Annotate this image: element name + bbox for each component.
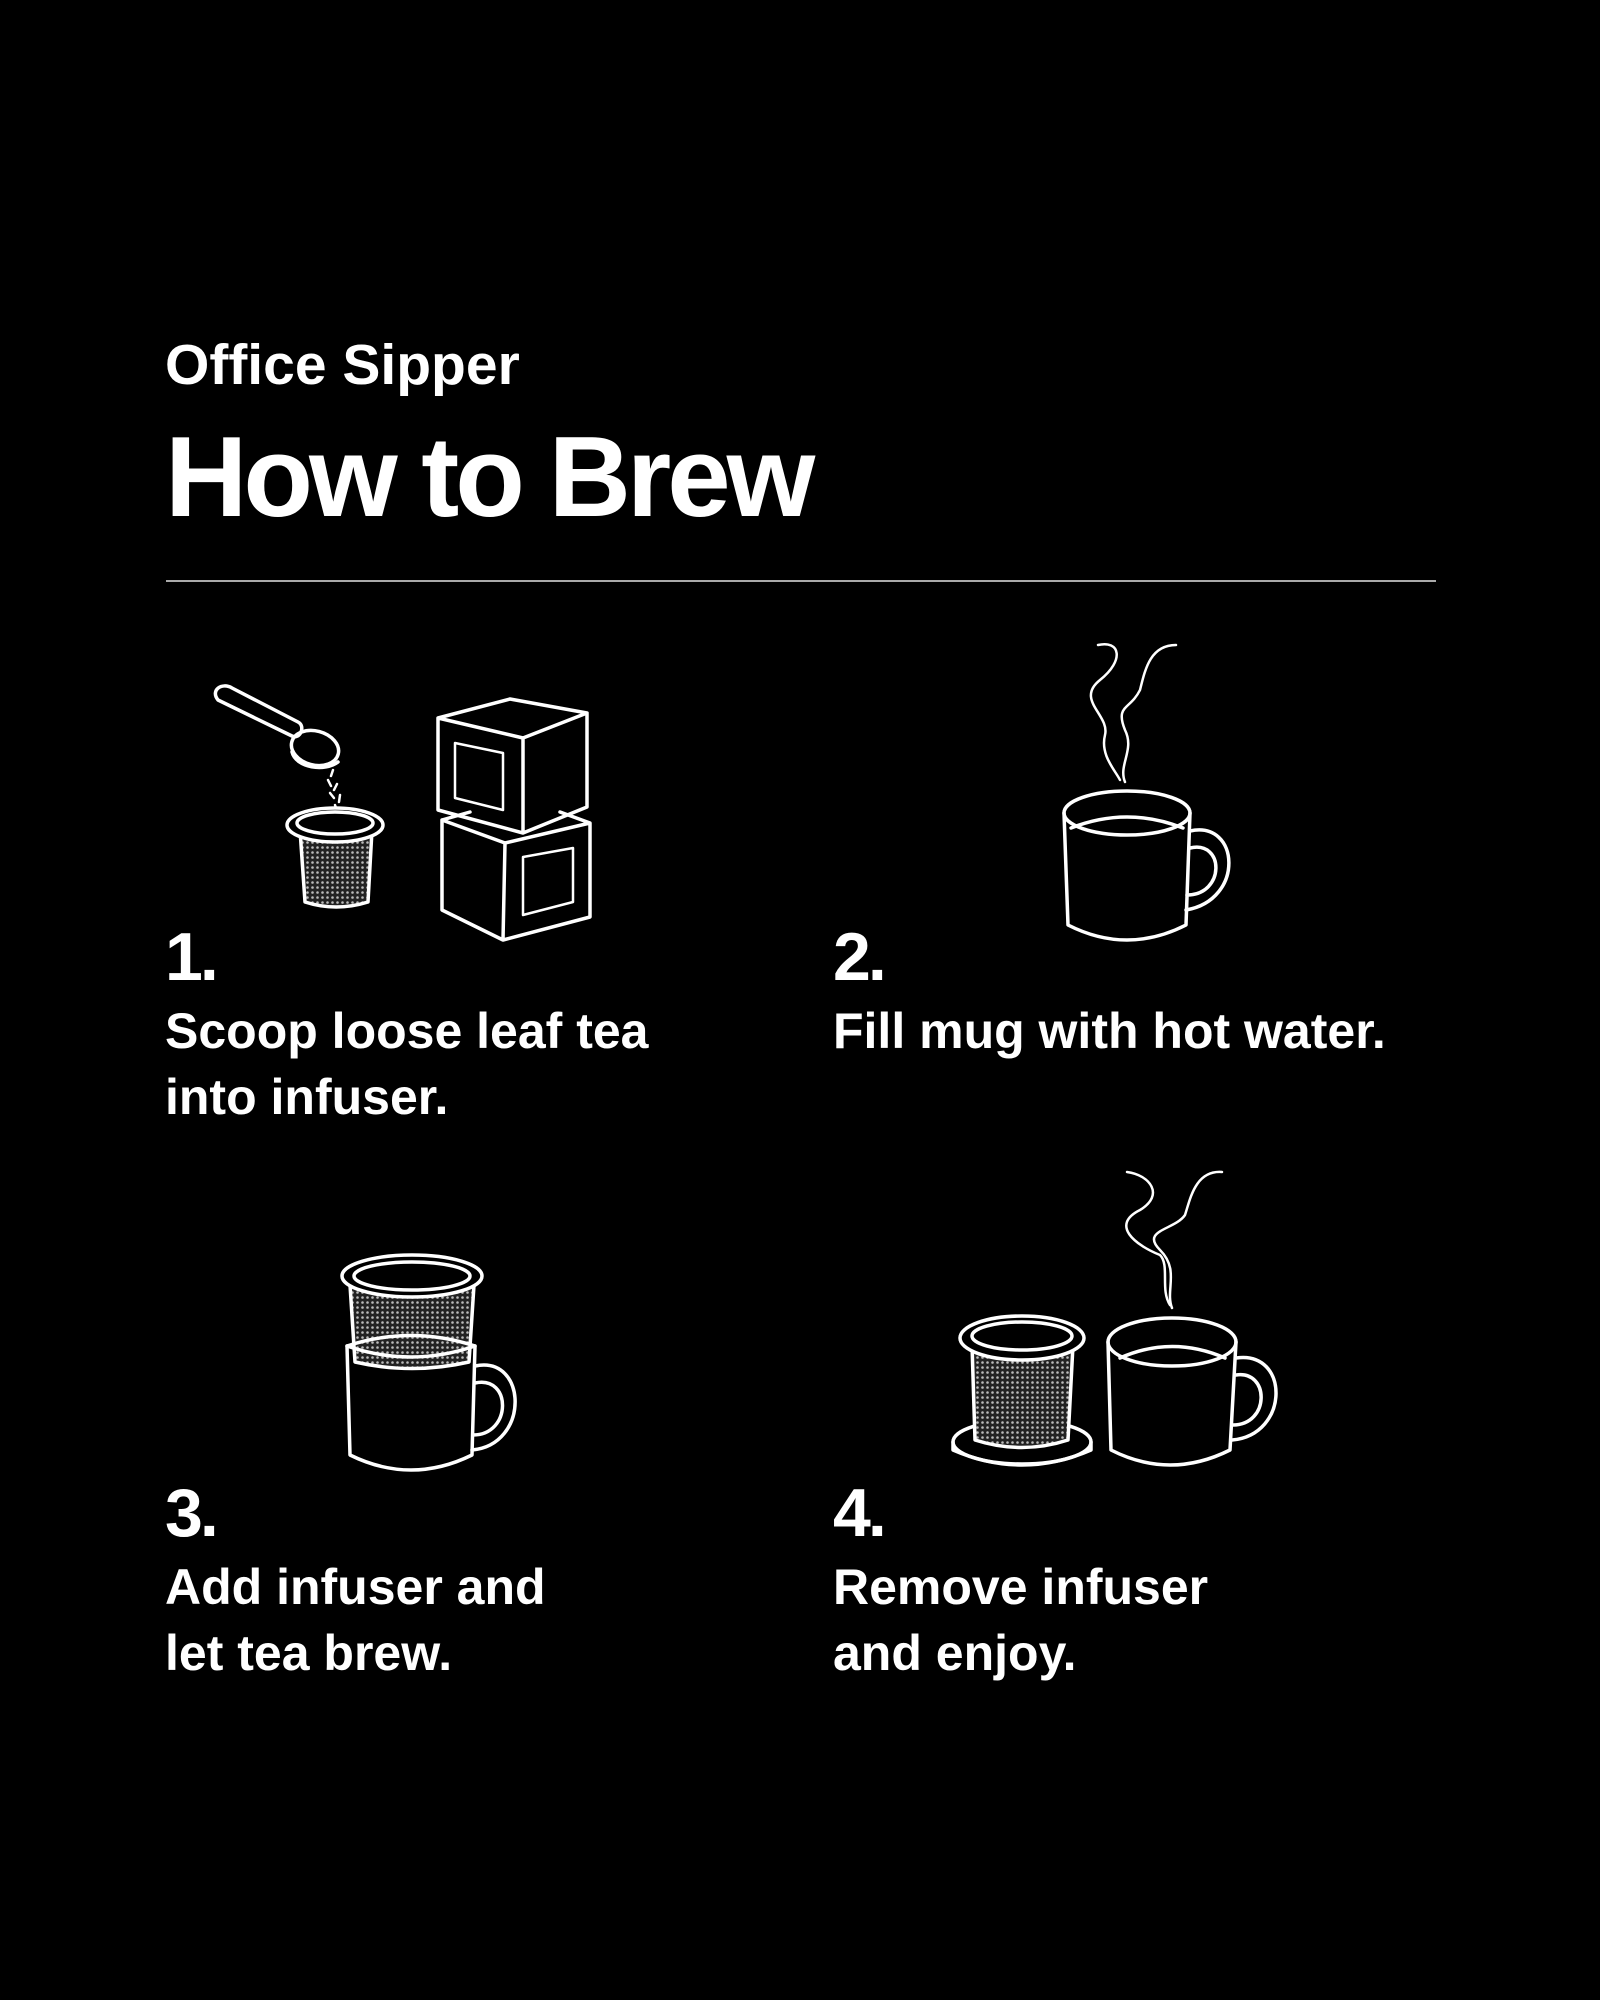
step 2 text: Fill mug with hot water. (833, 1003, 1386, 1059)
step 1 text: Scoop loose leaf tea (165, 1003, 648, 1059)
step 4 number: 4. (833, 1475, 884, 1551)
step 4 (833, 1475, 1208, 1681)
step 4 text: Remove infuser (833, 1559, 1208, 1615)
step 1 text: into infuser. (165, 1069, 448, 1125)
step 3 text (165, 1559, 546, 1681)
icon: infuser on saucer and mug with steam (953, 1172, 1276, 1465)
subtitle: Office Sipper (165, 333, 520, 397)
step 3 text: let tea brew. (165, 1625, 452, 1681)
step 1 number: 1. (165, 919, 216, 995)
step 1 text (165, 1003, 649, 1125)
step 3 text: Add infuser and (165, 1559, 546, 1615)
step 4 text: and enjoy. (833, 1625, 1077, 1681)
title: How to Brew (165, 414, 811, 541)
step 1 (165, 919, 649, 1125)
step 2 (833, 919, 1386, 1059)
icon: mug with steam (1064, 644, 1229, 940)
step 4 text (833, 1559, 1208, 1681)
step 3 (165, 1475, 546, 1681)
step 2 number: 2. (833, 919, 884, 995)
step 3 number: 3. (165, 1475, 216, 1551)
icon: spoon and infuser and boxes (215, 686, 590, 940)
icon: infuser in mug (342, 1255, 515, 1470)
